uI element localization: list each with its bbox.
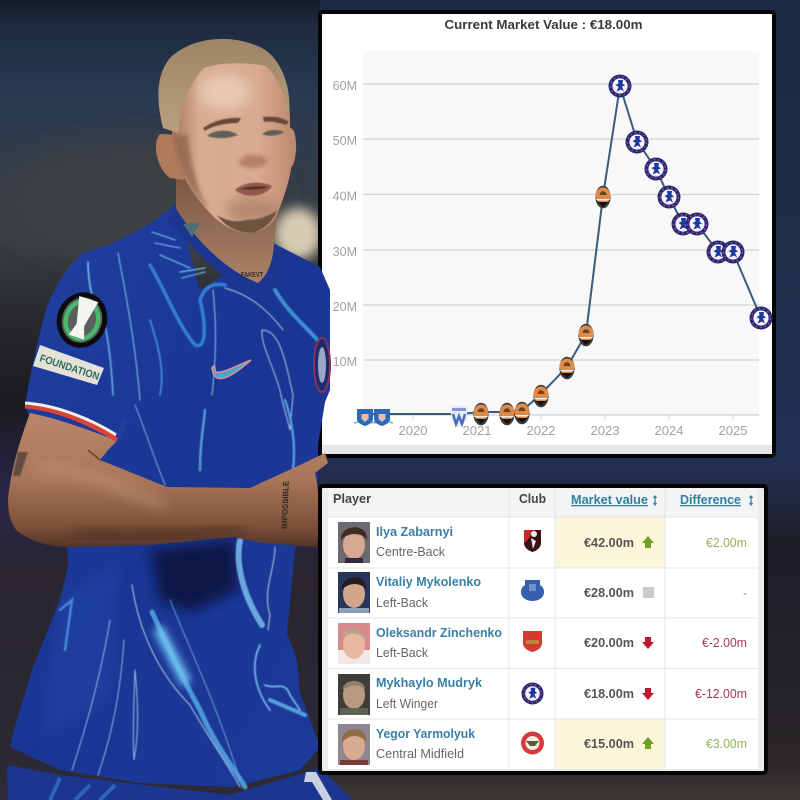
x axis labels: 2023 — [591, 423, 619, 438]
no change square — [643, 587, 654, 598]
row: Oleksandr Zinchenko — [338, 623, 747, 664]
crest: Chelsea — [521, 682, 544, 705]
y axis labels — [333, 79, 357, 369]
x axis labels: 2025 — [719, 423, 747, 438]
table header: Club — [519, 492, 546, 506]
jersey — [10, 203, 330, 787]
club markers: Chelsea — [608, 74, 772, 330]
arrow up — [642, 737, 654, 749]
head — [158, 39, 296, 233]
crest: Brentford — [521, 732, 544, 754]
crest: Bournemouth — [524, 530, 541, 552]
row: Vitaliy Mykolenko: Vitaliy Mykolenko — [376, 574, 481, 589]
x axis labels — [399, 423, 747, 438]
crest: Arsenal — [523, 631, 542, 652]
row: Yegor Yarmolyuk: €3.00m — [706, 736, 747, 751]
patch: foundation: FOUNDATION — [38, 352, 101, 383]
row: Vitaliy Mykolenko: - — [743, 586, 747, 600]
ear — [156, 134, 184, 180]
row: Vitaliy Mykolenko — [338, 572, 747, 613]
y axis labels: 60M — [333, 79, 357, 93]
table header: Market value — [571, 493, 648, 507]
table header: Difference — [680, 493, 741, 507]
jersey marble pattern — [60, 232, 322, 787]
jersey pale band — [158, 628, 187, 684]
arrow down — [642, 637, 654, 649]
row: Ilya Zabarnyi: Centre-Back — [376, 545, 446, 559]
arm tattoo — [13, 452, 28, 476]
row: Yegor Yarmolyuk: Central Midfield — [376, 747, 464, 761]
photo — [338, 724, 370, 765]
mouth — [235, 183, 272, 196]
neck — [176, 170, 278, 283]
collar — [168, 203, 283, 296]
eyes — [207, 131, 238, 138]
photo — [338, 674, 370, 715]
row: Yegor Yarmolyuk: €15.00m — [584, 736, 634, 751]
row: Ilya Zabarnyi — [338, 522, 747, 563]
y axis labels: 50M — [333, 134, 357, 148]
y axis labels: 30M — [333, 245, 357, 259]
plot area — [363, 51, 759, 415]
sleeve cuff — [25, 403, 126, 440]
row: Ilya Zabarnyi: Ilya Zabarnyi — [376, 524, 453, 539]
nose — [238, 155, 268, 168]
table header — [328, 488, 758, 517]
y axis labels: 10M — [333, 355, 357, 369]
row: Mykhaylo Mudryk: €-12.00m — [695, 686, 747, 701]
row: Mykhaylo Mudryk: €18.00m — [584, 686, 634, 701]
photo — [338, 522, 370, 563]
row: Yegor Yarmolyuk — [338, 724, 747, 765]
value line — [365, 86, 761, 414]
club markers: early clubs — [354, 406, 467, 428]
badge: conference league — [50, 286, 114, 354]
y axis labels: 20M — [333, 300, 357, 314]
row: Oleksandr Zinchenko: €20.00m — [584, 635, 634, 650]
row: Oleksandr Zinchenko: €-2.00m — [702, 635, 747, 650]
table header: Player — [333, 492, 371, 506]
photo — [338, 572, 370, 613]
hair — [158, 39, 289, 133]
row: Yegor Yarmolyuk: Yegor Yarmolyuk — [376, 726, 476, 741]
arrow down — [642, 688, 654, 700]
club markers: Shakhtar — [473, 186, 611, 425]
panel: player table — [320, 486, 766, 773]
x axis labels: 2021 — [463, 423, 491, 438]
row: Vitaliy Mykolenko: Left-Back — [376, 596, 429, 610]
y axis labels: 40M — [333, 190, 357, 204]
row: Vitaliy Mykolenko: €28.00m — [584, 585, 634, 600]
chart title: Current Market Value : €18.00m — [444, 17, 642, 32]
crest on jersey — [314, 338, 330, 392]
row: Oleksandr Zinchenko: Left-Back — [376, 646, 429, 660]
neck tattoos — [183, 222, 264, 279]
row: Ilya Zabarnyi: €2.00m — [706, 535, 747, 550]
row: Oleksandr Zinchenko: Oleksandr Zinchenko — [376, 625, 502, 640]
row: Ilya Zabarnyi: €42.00m — [584, 535, 634, 550]
shorts — [7, 765, 353, 800]
arm — [8, 413, 328, 547]
wrist tattoo: IMPOSSIBLE — [280, 480, 291, 529]
row: Mykhaylo Mudryk: Left Winger — [376, 697, 438, 711]
player photo — [7, 39, 353, 800]
x axis labels: 2020 — [399, 423, 427, 438]
x axis labels: 2024 — [655, 423, 683, 438]
photo — [338, 623, 370, 664]
panel: market value chart — [320, 12, 774, 456]
row: Mykhaylo Mudryk — [338, 674, 747, 715]
swoosh logo — [212, 360, 251, 378]
neck tattoos: FAKEVT — [241, 272, 264, 279]
arrow up — [642, 536, 654, 548]
crest: Everton — [521, 580, 544, 601]
eyebrows — [203, 118, 241, 131]
row: Mykhaylo Mudryk: Mykhaylo Mudryk — [376, 675, 483, 690]
goatee — [217, 210, 277, 233]
x axis labels: 2022 — [527, 423, 555, 438]
